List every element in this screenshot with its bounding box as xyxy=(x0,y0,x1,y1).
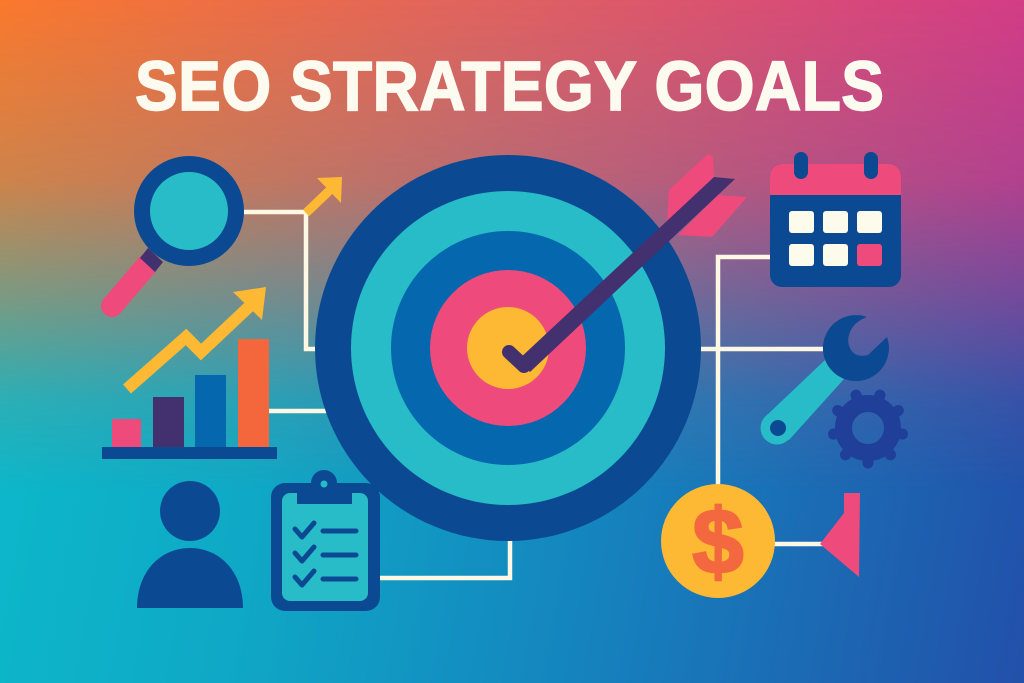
icon: pink funnel xyxy=(820,493,860,577)
icon: gear xyxy=(834,395,902,463)
title: SEO STRATEGY GOALS xyxy=(135,47,884,126)
icon: person xyxy=(137,481,243,608)
icon: wrench xyxy=(760,315,889,444)
target bullseye xyxy=(315,155,701,541)
icon: dollar coin: $ xyxy=(692,491,744,593)
icon: dollar coin xyxy=(661,484,775,598)
icon: small yellow arrow xyxy=(306,177,342,213)
icon: calendar xyxy=(770,152,901,287)
chart: growth bars with arrow xyxy=(102,287,277,459)
icon: magnifying glass xyxy=(112,164,236,306)
connector lines xyxy=(244,212,830,578)
icon: clipboard checklist xyxy=(271,470,380,611)
arrow in target xyxy=(509,154,747,372)
